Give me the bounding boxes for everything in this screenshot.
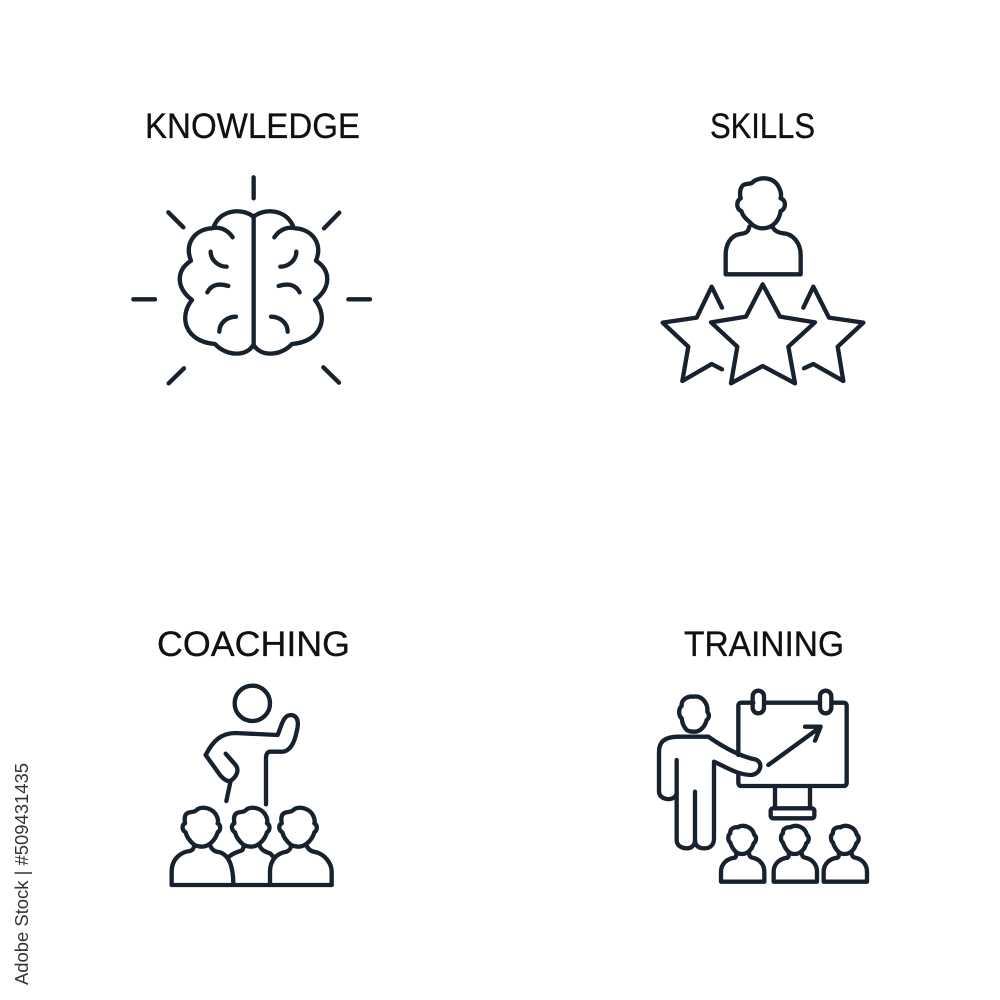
stock id text: Adobe Stock | #509431435 [12,763,32,985]
icon: trainer at board with audience [659,691,867,882]
heading: knowledge: KNOWLEDGE [145,107,360,146]
icon: brain with rays [133,177,370,383]
icon: coach with audience [172,686,332,885]
heading: skills: SKILLS [710,107,815,146]
heading: training: TRAINING [684,625,844,664]
icon: person with three stars [663,178,863,383]
heading: coaching: COACHING [157,625,350,664]
